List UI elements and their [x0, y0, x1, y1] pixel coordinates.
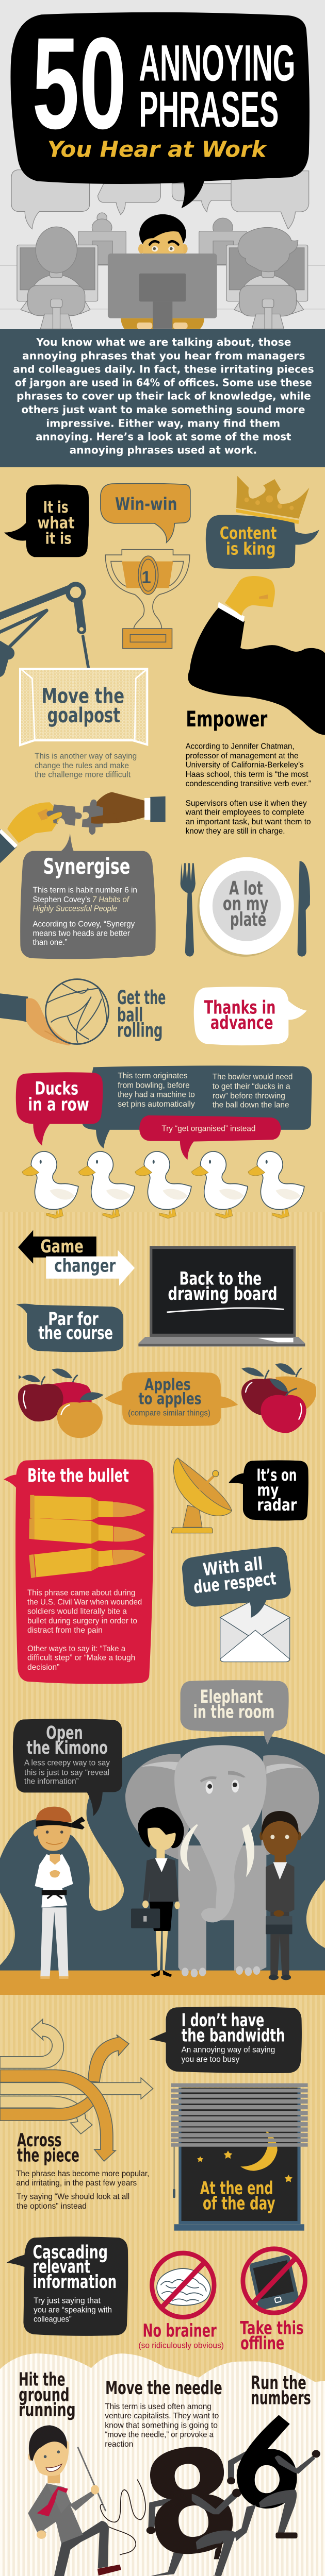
panel: synergise: Stephen Covey’s [32, 895, 91, 904]
bubble: content is king: is king [226, 539, 275, 558]
bubble: apples to apples [105, 1372, 238, 1426]
apples right [241, 1363, 316, 1433]
bubble: bandwidth: the bandwidth [182, 2025, 285, 2046]
bubble: it is what it is: It is [43, 498, 69, 517]
panel: ducks explanation: This term originates [118, 1072, 188, 1080]
section: ducks and drawing board [16, 1065, 312, 1352]
phrase: get the ball rolling: Get the [117, 987, 166, 1009]
bubble: open the kimono [13, 1719, 122, 1816]
elephant [125, 1745, 319, 1977]
bubble: thanks in advance [194, 987, 307, 1045]
bubble: it's on my radar: radar [257, 1495, 297, 1515]
panel: synergise: Synergise [43, 854, 130, 879]
icon: arrows across the piece [0, 2019, 153, 2161]
plate with fork and knife [181, 857, 310, 957]
section: intro and tan top [0, 336, 325, 735]
arrow: game: Game [40, 1236, 84, 1257]
panel: ducks explanation: from bowling, before [118, 1081, 190, 1090]
across the piece text: Try saying “We should look at all [17, 2193, 129, 2201]
phrase: take this offline: Take this [240, 2318, 304, 2339]
plate with fork and knife: on my [223, 893, 268, 915]
bubble: thanks in advance: advance [210, 1012, 273, 1033]
phrase: get the ball rolling: rolling [117, 1019, 163, 1042]
bubble: apples to apples: Apples [144, 1375, 191, 1394]
across the piece text: the piece [17, 2145, 79, 2166]
bubble: win-win: Win-win [115, 494, 177, 514]
panel: synergise: than one.” [32, 938, 68, 947]
phrase: move the needle: know that something is going to [105, 2421, 218, 2430]
bubble: open the kimono: the Kimono [26, 1737, 108, 1758]
across the piece text: The phrase has become more popular, [16, 2170, 149, 2178]
empower heading: Empower [186, 706, 267, 732]
intro paragraph: of jargon are used in 64% of offices. Some use these [15, 376, 312, 389]
drawing board laptop [138, 1246, 305, 1347]
bubble: content is king [206, 515, 319, 569]
panel: ducks explanation: row” before throwing [213, 1092, 285, 1100]
businessman [259, 1811, 301, 1980]
empower text: Supervisors often use it when they [186, 799, 307, 808]
phrase: no brainer: No brainer [142, 2320, 217, 2342]
window at night: At the end [200, 2178, 273, 2199]
icon: trophy [105, 550, 190, 649]
bubble: bandwidth [149, 2007, 302, 2073]
panel: bite the bullet: bullet during surgery in order to [27, 1617, 137, 1625]
goalpost description: the challenge more difficult [35, 771, 131, 779]
panel: synergise [20, 833, 156, 959]
arrow: changer [46, 1250, 135, 1285]
hands with puzzle pieces [0, 792, 166, 863]
bubble: apples to apples: (compare similar things) [128, 1409, 210, 1418]
intro paragraph: others just want to make something sound more [21, 403, 305, 416]
panel: ducks explanation: set pins automatically [118, 1100, 195, 1109]
phrase: move the needle: Move the needle [105, 2377, 222, 2399]
plate with fork and knife: A lot [229, 878, 263, 899]
phrase: take this offline [240, 2318, 304, 2354]
intro paragraph [13, 336, 314, 456]
bubble: par for the course: Par for [48, 1309, 99, 1330]
bubble: cascading relevant information: relevant [32, 2256, 90, 2277]
panel: bite the bullet: distract from the pain [27, 1626, 103, 1635]
panel: bite the bullet: Bite the bullet [27, 1465, 129, 1486]
panel: bite the bullet: This phrase came about during [27, 1588, 135, 1598]
icon: no phone [243, 2249, 305, 2313]
flexed arm empower [188, 576, 325, 735]
panel: bite the bullet: decision” [27, 1663, 59, 1672]
intro paragraph: You know what we are talking about, those [36, 336, 291, 348]
intro paragraph: annoying. Here’s a look at some of the most [36, 430, 291, 443]
panel: ducks explanation [82, 1065, 312, 1148]
intro paragraph: annoying phrases used at work. [70, 444, 257, 456]
panel: synergise: 7 Habits of [92, 895, 130, 904]
bubble: elephant in the room: Elephant [200, 1687, 263, 1707]
icon: radar dish [171, 1458, 232, 1533]
phrase: hit the ground running: ground [19, 2384, 70, 2406]
bubble: open the kimono: this is just to say “reveal [24, 1768, 109, 1777]
arrow: changer: changer [54, 1256, 116, 1277]
background: elephant room floor [0, 1969, 325, 1995]
phrase: move the needle: “move the needle,” or provoke a [105, 2430, 214, 2439]
phrase: get the ball rolling [117, 987, 166, 1042]
phrase: move the needle: reaction [105, 2440, 133, 2449]
empower text [185, 742, 311, 836]
section: apples, bullets, radar [4, 1363, 316, 1684]
section: elephant in the room [0, 1680, 325, 1980]
across the piece text: and irritating, in the past few years [16, 2179, 137, 2188]
empower text: an important task, but want them to [186, 818, 311, 826]
bubble: cascading relevant information: you are “speaking with [34, 2306, 112, 2315]
apples left [18, 1368, 104, 1438]
bubble: bandwidth: I don’t have [182, 2010, 264, 2031]
bubble: cascading relevant information [7, 2236, 128, 2336]
drawing board laptop: drawing board [168, 1284, 278, 1304]
across the piece text [16, 2129, 149, 2211]
bubble: par for the course: the course [38, 1323, 113, 1344]
worried man behind monitor [108, 214, 217, 329]
background: grey office header [0, 0, 325, 330]
karate man [34, 1807, 86, 1979]
window at night: of the day [203, 2193, 275, 2214]
phrase: take this offline: offline [240, 2333, 284, 2354]
right colleague at monitor [226, 228, 308, 329]
bubble: bandwidth: you are too busy [182, 2055, 239, 2064]
across the piece text: the options” instead [17, 2202, 87, 2211]
goal with phrase: goalpost [47, 704, 120, 727]
phrase: hit the ground running: running [19, 2399, 76, 2421]
panel: synergise: means two heads are better [32, 929, 130, 938]
icon: drafting arm [0, 584, 89, 670]
across the piece text: Across [17, 2129, 61, 2151]
bubble: with all due respect: due respect [192, 1568, 277, 1598]
panel: bite the bullet: soldiers would literally bite a [27, 1607, 127, 1616]
panel: ducks explanation: to get their “ducks in a [213, 1082, 290, 1091]
section: goalpost, empower, synergise, plate [0, 669, 311, 1045]
phrase: get the ball rolling: ball [117, 1004, 143, 1026]
panel: synergise: Highly Successful People [32, 904, 117, 913]
phrase: move the needle: venture capitalists. They want to [105, 2412, 219, 2420]
goal with phrase [20, 669, 147, 745]
icon: crown [236, 476, 309, 524]
empower text: want their employees to complete [185, 808, 304, 817]
background blob: dark wall [0, 1736, 325, 1971]
plate with fork and knife: plate [230, 909, 266, 930]
panel: ducks explanation: the ball down the lane [213, 1100, 289, 1110]
bubble: with all due respect: With all [202, 1553, 264, 1580]
left colleague at monitor [17, 227, 98, 329]
running number 6 [227, 2415, 320, 2541]
bubble: it is what it is: what [37, 514, 75, 532]
phrase: move the needle: This term is used often among [105, 2402, 212, 2411]
bubble: win-win [101, 483, 190, 543]
businesswoman [131, 1807, 184, 1977]
bubble: open the kimono: Open [46, 1722, 83, 1743]
bubble: elephant in the room: in the room [193, 1702, 274, 1723]
background: striped tan section [0, 1212, 325, 2397]
panel: synergise: This term is habit number 6 in [32, 886, 137, 895]
bubble: it's on my radar: my [257, 1480, 279, 1500]
bubble: ducks in a row: in a row [28, 1094, 89, 1115]
bubble: bandwidth: An annoying way of saying [182, 2045, 275, 2055]
drawing board laptop: Back to the [180, 1268, 262, 1290]
section: arrows, bandwidth, window, cascading [0, 2007, 308, 2354]
bubble: open the kimono: A less creepy way to say [24, 1758, 110, 1768]
section: running people and study panel [5, 2369, 320, 2576]
subtitle: You Hear at Work [47, 137, 268, 163]
background: intro band [0, 329, 325, 467]
title speech bubble [10, 10, 310, 208]
title number 50: 50 [32, 10, 126, 156]
phrase: run the numbers [251, 2372, 311, 2409]
intro paragraph: annoying phrases that you hear from managers [22, 349, 305, 362]
icon: no brain [152, 2253, 214, 2317]
panel: synergise: According to Covey, “Synergy [32, 920, 135, 929]
empower text: condescending transitive verb ever.” [186, 779, 311, 788]
phrase: hit the ground running: Hit the [19, 2369, 66, 2391]
gray speech bubbles [11, 170, 309, 229]
empower text: professor of management at the [186, 752, 299, 760]
bubble: with all due respect [182, 1547, 291, 1618]
bubble: it's on my radar: It’s on [256, 1465, 297, 1485]
intro paragraph: phrases to cover up their lack of knowledge, while [17, 389, 311, 402]
bubble: it is what it is: it is [45, 529, 72, 548]
bubble: open the kimono: the information” [24, 1777, 79, 1786]
bubble: cascading relevant information: Cascading [32, 2242, 108, 2263]
bubble: cascading relevant information: Try just saying that [34, 2296, 101, 2306]
panel: bite the bullet: the U.S. Civil War when wounded [27, 1598, 142, 1607]
background: plain tan section [0, 467, 325, 1212]
empower text: According to Jennifer Chatman, [186, 742, 295, 751]
panel: bite the bullet [4, 1459, 154, 1684]
phrase: no brainer: (so ridiculously obvious) [138, 2341, 224, 2350]
back colleague with bun [78, 213, 126, 265]
back colleague right [199, 218, 247, 265]
bubble: ducks in a row [16, 1072, 103, 1146]
bubble: par for the course [16, 1303, 123, 1352]
running man with needle [9, 2425, 145, 2576]
bubble: apples to apples: to apples [138, 1389, 202, 1409]
empower text: University of California-Berkeley’s [186, 760, 304, 770]
bubble: ducks in a row: Ducks [35, 1078, 78, 1099]
window blinds [171, 2083, 308, 2147]
bubble: elephant in the room [181, 1680, 289, 1744]
bubble: cascading relevant information: colleagues” [34, 2315, 72, 2324]
empower text: Haas school, this term is “the most [186, 770, 308, 779]
icon: ball and hand [0, 979, 109, 1045]
phrase: move the needle [105, 2377, 222, 2449]
five ducks [22, 1151, 304, 1218]
bubble: it's on my radar [229, 1460, 308, 1521]
intro paragraph: and colleagues daily. In fact, these irritating pieces [13, 363, 314, 376]
panel: bite the bullet: Other ways to say it: “Take a [27, 1645, 125, 1653]
bubble: thanks in advance: Thanks in [204, 997, 275, 1019]
panel: ducks explanation: they had a machine to [118, 1090, 195, 1099]
arrow: game [18, 1230, 96, 1264]
phrase: hit the ground running [19, 2369, 76, 2421]
goal with phrase: Move the [41, 685, 124, 708]
bubble: try get organised [139, 1115, 281, 1160]
goalpost description: change the rules and make [35, 761, 129, 770]
phrase: no brainer [138, 2320, 224, 2350]
intro paragraph: impressive. Either way, many find them [46, 417, 280, 429]
icon: trophy: 1 [141, 568, 151, 587]
icon: envelope [220, 1599, 290, 1662]
section: header office scene [0, 10, 325, 329]
background: scalloped cream wall [0, 2353, 325, 2576]
bubble: cascading relevant information: information [32, 2271, 117, 2293]
panel: ducks explanation: The bowler would need [213, 1073, 293, 1081]
bubble: try get organised: Try “get organised” instead [161, 1125, 255, 1133]
icon: bullets [29, 1495, 145, 1578]
window at night [171, 2083, 308, 2231]
panel: bite the bullet: difficult step” or “Make a tough [27, 1653, 135, 1663]
empower text: know they are still in charge. [186, 827, 285, 836]
goalpost description: This is another way of saying [35, 752, 137, 761]
goalpost description [35, 752, 137, 779]
bubble: it is what it is [4, 484, 89, 557]
bubble: content is king: Content [220, 523, 277, 543]
